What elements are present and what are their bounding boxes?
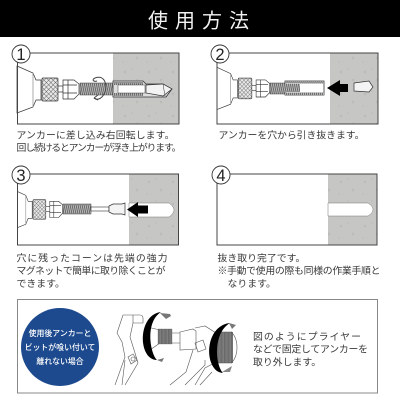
text: step 4: ※手動で使用の際も同様の作業手順と: [218, 264, 380, 277]
text: step 4: なります。: [228, 278, 276, 290]
illustration: pliers: [115, 310, 237, 385]
icon: left rotation arrow: [143, 310, 171, 362]
panel 1 illustration: [17, 53, 179, 124]
panel: step 3: [0, 166, 178, 290]
panel 3 illustration: [0, 174, 178, 245]
number 1: 1: [16, 46, 26, 64]
callout: blue circle: 離れない場合: [36, 356, 84, 366]
text: step 3: できます。: [16, 278, 65, 290]
text: step 4: [218, 252, 380, 290]
cone: [354, 81, 373, 92]
callout: blue circle: 使用後アンカーと: [29, 328, 91, 338]
text: step 1: アンカーに差し込み右回転します。: [16, 128, 174, 142]
number 4: [212, 166, 230, 185]
text: step 3: [16, 252, 168, 290]
text: step 1: 回し続けるとアンカーが浮き上がります。: [16, 141, 182, 154]
panel 4 illustration: [217, 174, 377, 245]
panel: pliers note: [18, 300, 378, 393]
panel: step 1: [12, 45, 182, 154]
text: step 3: マグネットで簡単に取り除くことが: [16, 264, 166, 277]
callout: blue circle: ビットが喰い付いて: [25, 342, 95, 352]
text: pliers note: [253, 331, 368, 368]
number 2: 2: [215, 46, 225, 64]
icon: right rotation arrow: [209, 323, 236, 373]
number 3: [12, 166, 30, 185]
text: step 1: [16, 128, 182, 154]
title bar: [0, 0, 400, 37]
text: step 3: 穴に残ったコーンは先端の強力: [16, 252, 168, 264]
text: step 2: アンカーを穴から引き抜きます。: [218, 128, 364, 142]
number 1: [12, 45, 30, 64]
text: pliers note: 図のようにプライヤー: [253, 331, 361, 343]
icon: rotation arrow: [93, 77, 106, 100]
arrow: [327, 80, 348, 96]
text: pliers note: 取り外します。: [253, 356, 321, 368]
number 2: [211, 45, 229, 64]
callout: blue circle: [21, 308, 99, 386]
number 3: 3: [16, 167, 26, 185]
number 4: 4: [216, 167, 226, 185]
arrow: [127, 202, 148, 217]
panel: step 2: [211, 45, 378, 142]
text: step 4: 抜き取り完了です。: [218, 252, 305, 264]
panel 2 illustration: [217, 53, 378, 124]
text: pliers note: などで固定してアンカーを: [253, 344, 368, 356]
panel: step 4: [212, 166, 380, 290]
title: 使用方法: [148, 10, 256, 32]
